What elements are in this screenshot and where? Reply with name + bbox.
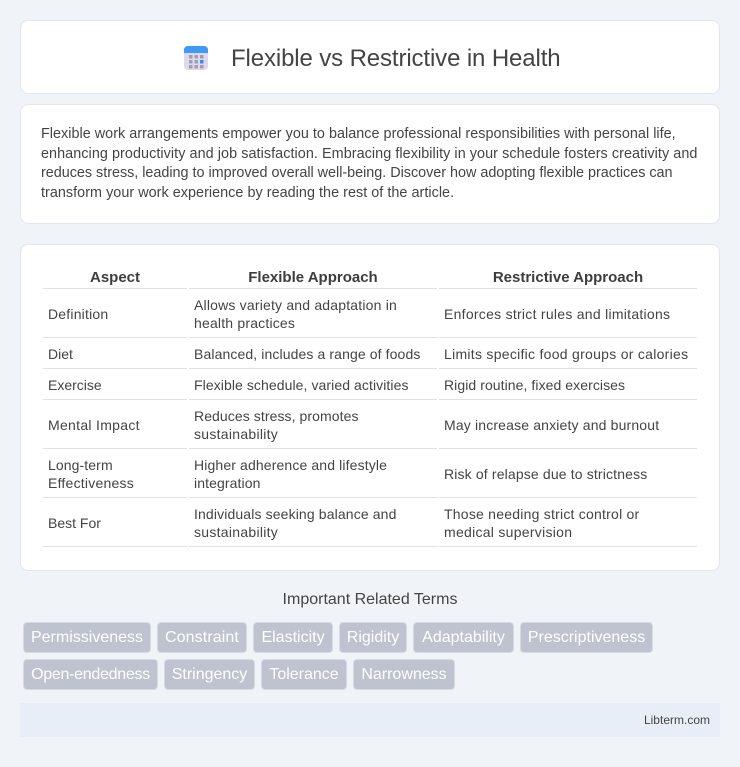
text block: introduction	[41, 126, 697, 201]
comparison table: Aspect	[90, 269, 140, 286]
related terms tags: Open-endedness	[31, 666, 150, 683]
comparison table: sustainability	[194, 426, 278, 442]
comparison table: Effectiveness	[48, 474, 134, 490]
comparison table: Higher adherence and lifestyle	[194, 456, 387, 472]
panel: header	[20, 20, 720, 94]
comparison table: medical supervision	[444, 524, 572, 540]
comparison table: Mental Impact	[48, 416, 140, 432]
related terms tags: Rigidity	[347, 629, 399, 646]
comparison table: Enforces strict rules and limitations	[444, 306, 670, 322]
related terms tags: Constraint	[165, 629, 239, 646]
comparison table: Risk of relapse due to strictness	[444, 466, 647, 482]
panel: introduction	[20, 104, 720, 224]
comparison table: Balanced, includes a range of foods	[194, 346, 420, 362]
comparison table: Individuals seeking balance and	[194, 506, 397, 522]
related terms tags: Narrowness	[361, 666, 447, 683]
panel: comparison table	[20, 244, 720, 571]
comparison table: Limits specific food groups or calories	[444, 346, 688, 362]
comparison table: Reduces stress, promotes	[194, 408, 359, 424]
icon: calendar	[184, 46, 208, 70]
comparison table: integration	[194, 474, 260, 490]
related terms tags: Adaptability	[422, 629, 505, 646]
comparison table: health practices	[194, 314, 295, 330]
comparison table: Exercise	[48, 376, 102, 392]
heading: important related terms: Important Related Terms	[283, 591, 457, 608]
text block: introduction: transform your work experience by reading the rest of the article.	[41, 185, 454, 201]
related terms tags: Prescriptiveness	[528, 629, 645, 646]
comparison table: sustainability	[194, 524, 278, 540]
text block: introduction: enhancing productivity and job satisfaction. Embracing flexibility in your schedule fosters creativity and	[41, 146, 697, 162]
comparison table: Allows variety and adaptation in	[194, 296, 397, 312]
comparison table: Flexible schedule, varied activities	[194, 376, 409, 392]
comparison table: Long-term	[48, 456, 113, 472]
comparison table	[43, 269, 697, 547]
footer	[20, 703, 720, 737]
title: Flexible vs Restrictive in Health	[231, 45, 560, 72]
related terms tags: Tolerance	[269, 666, 339, 683]
text block: introduction: Flexible work arrangements empower you to balance professional responsibilities with personal life,	[41, 126, 676, 142]
related terms tags: Stringency	[172, 666, 247, 683]
comparison table: Flexible Approach	[248, 269, 378, 286]
comparison table: Diet	[48, 346, 73, 362]
text block: introduction: reduces stress, leading to improved overall well-being. Discover how adopting flexible practices can	[41, 165, 673, 181]
footer source: Libterm.com	[644, 713, 710, 727]
comparison table: Restrictive Approach	[493, 269, 643, 286]
comparison table: May increase anxiety and burnout	[444, 416, 659, 432]
comparison table: Rigid routine, fixed exercises	[444, 376, 625, 392]
comparison table: Best For	[48, 514, 101, 530]
related terms tags	[23, 622, 653, 690]
comparison table: Definition	[48, 306, 108, 322]
comparison table: Those needing strict control or	[444, 506, 639, 522]
related terms tags: Elasticity	[261, 629, 325, 646]
related terms tags: Permissiveness	[31, 629, 143, 646]
